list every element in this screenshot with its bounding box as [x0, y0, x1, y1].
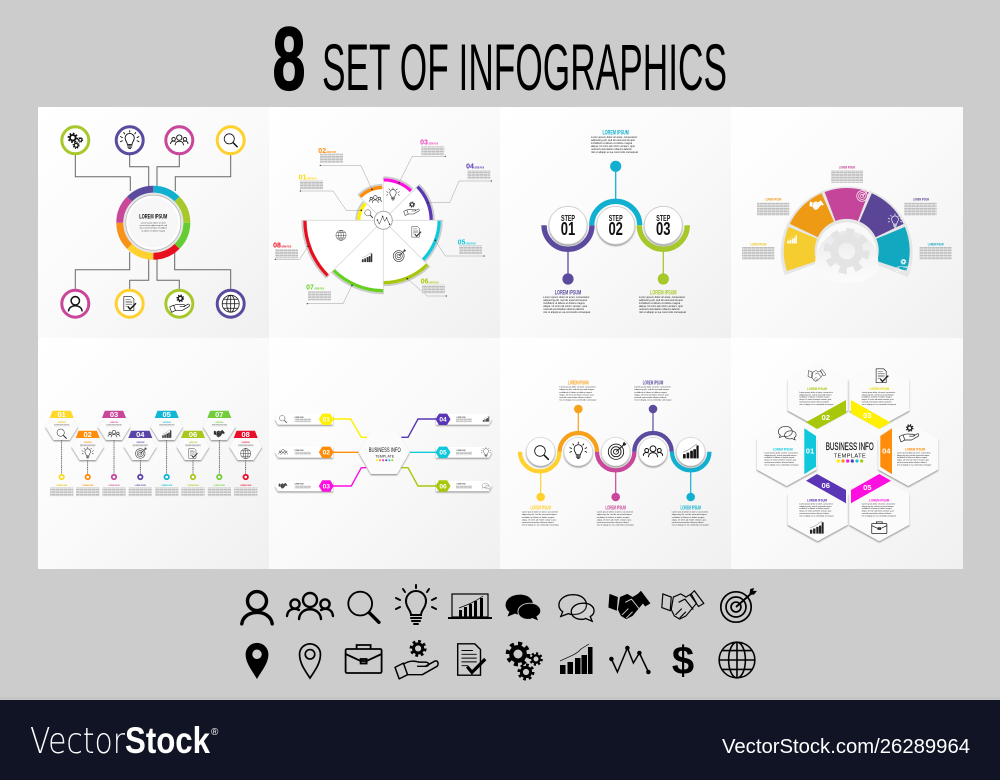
wedge captions: 02	[318, 148, 326, 155]
panel: three steps	[500, 107, 731, 338]
wave captions: nostrud exercitation ullamco laboris	[634, 396, 666, 399]
wedge captions: LOREM IPSUM	[306, 176, 316, 180]
hub center text	[123, 193, 183, 253]
hexagon captions: Lorem ipsum dolor sit amet, consectetur	[764, 451, 798, 454]
wave captions: adipiscing elit, sed do eiusmod tempor	[672, 513, 707, 516]
icon circles	[62, 127, 244, 317]
hexagon captions: LOREM IPSUM	[905, 446, 925, 452]
bar captions: LOREM IPSUM	[456, 484, 466, 486]
hexagon captions: adipiscing elit, sed do eiusmod tempor	[799, 393, 832, 396]
wave captions: aliqua. Ut enim ad minim veniam, quis	[597, 518, 631, 521]
number hexagons	[319, 414, 450, 492]
hub center text: ut labore et dolore magna	[141, 229, 166, 232]
step labels: 03	[656, 219, 671, 239]
wave captions: nisi ut aliquip ex ea commodo consequat	[522, 524, 559, 527]
wedge captions: LOREM IPSUM	[326, 150, 336, 154]
tab numbers: 08	[242, 430, 250, 439]
hexagon captions: nostrud exercitation ullamco laboris	[862, 400, 891, 404]
wedge edges	[302, 178, 441, 292]
panel: business info hub with six bars	[269, 338, 500, 569]
connectors	[333, 419, 436, 486]
hexagon captions: adipiscing elit, sed do eiusmod tempor	[799, 505, 832, 508]
wedge captions: LOREM IPSUM	[474, 166, 484, 170]
wave captions: aliqua. Ut enim ad minim veniam, quis	[672, 518, 706, 521]
footer band	[0, 697, 1000, 780]
hexagon captions: incididunt ut labore et dolore magna	[764, 456, 795, 459]
step captions: nisi ut aliquip ex ea commodo consequat	[543, 310, 590, 314]
center hexagon	[358, 430, 410, 474]
hexagon captions: aliqua. Ut enim ad minim veniam, quis	[862, 398, 894, 401]
backing arc	[785, 191, 908, 314]
wave captions: nostrud exercitation ullamco laboris	[597, 521, 629, 524]
hexagon captions: LOREM IPSUM	[773, 446, 793, 452]
hexagons	[757, 363, 938, 541]
step labels: STEP	[561, 213, 575, 223]
wedge icons	[336, 188, 421, 262]
band numbers: 06	[821, 481, 830, 490]
timeline captions: LOREM IPSUM	[163, 422, 171, 424]
wave captions: adipiscing elit, sed do eiusmod tempor	[559, 388, 594, 391]
wave captions: nisi ut aliquip ex ea commodo consequat	[634, 399, 672, 402]
band numbers: 03	[863, 411, 872, 420]
timeline captions: LOREM IPSUM	[242, 442, 250, 444]
step captions: aliqua. Ut enim ad minim veniam, quis	[543, 304, 588, 308]
wave captions: LOREM IPSUM	[568, 380, 589, 386]
title	[272, 10, 727, 110]
stems and pins	[536, 405, 695, 501]
center title: BUSINESS INFO	[826, 441, 874, 453]
hexagon captions: nostrud exercitation ullamco laboris	[862, 512, 891, 515]
wedge captions: 07	[306, 284, 314, 292]
numbers: 02	[323, 450, 330, 457]
tab numbers	[58, 410, 250, 439]
hexagon captions: incididunt ut labore et dolore magna	[862, 396, 893, 399]
step badges	[549, 206, 682, 244]
footer logo	[30, 720, 219, 762]
wave captions: incididunt ut labore et dolore magna	[559, 391, 593, 394]
step captions	[543, 130, 686, 314]
timeline captions: LOREM IPSUM	[189, 442, 197, 444]
center text: TEMPLATE	[375, 455, 395, 459]
numbers: 06	[439, 483, 447, 490]
hexagon captions: Lorem ipsum dolor sit amet, consectetur	[799, 391, 833, 394]
wedge captions: 06	[421, 278, 428, 286]
wave captions: nostrud exercitation ullamco laboris	[672, 521, 704, 524]
step captions: incididunt ut labore et dolore magna	[591, 141, 633, 145]
hexagon captions: adipiscing elit, sed do eiusmod tempor	[862, 505, 894, 508]
numbers	[323, 417, 447, 490]
wave captions: incididunt ut labore et dolore magna	[597, 516, 630, 519]
hexagon captions: nisi ut aliquip ex ea commodo consequat	[897, 463, 932, 466]
bar icons	[278, 415, 491, 489]
leader dots	[275, 156, 492, 304]
icon set: row 1	[242, 585, 757, 624]
center title: TEMPLATE	[834, 454, 866, 460]
wedge captions: LOREM IPSUM	[466, 242, 476, 246]
timeline captions: LOREM IPSUM	[84, 442, 92, 444]
segment captions	[742, 165, 952, 260]
numbers: 04	[439, 417, 447, 424]
step captions: LOREM IPSUM	[555, 290, 582, 296]
step labels: STEP	[609, 213, 623, 223]
colored segments	[783, 188, 910, 314]
timeline captions: LOREM IPSUM	[108, 485, 120, 487]
wave captions: incididunt ut labore et dolore magna	[634, 391, 668, 394]
hexagon captions: nostrud exercitation ullamco laboris	[764, 461, 794, 464]
wave captions: Lorem ipsum dolor sit amet, consectetur	[597, 511, 633, 514]
panel: semicircle gear	[731, 107, 963, 338]
center text: BUSINESS INFO	[369, 447, 401, 454]
wave captions: aliqua. Ut enim ad minim veniam, quis	[634, 393, 669, 396]
timeline captions: LOREM IPSUM	[214, 485, 225, 487]
tab numbers: 02	[84, 430, 92, 439]
gear	[828, 232, 866, 270]
hexagon captions: nostrud exercitation ullamco laboris	[799, 512, 829, 515]
footer link: VectorStock.com/26289964	[722, 735, 970, 758]
wedge captions: LOREM IPSUM	[281, 244, 291, 248]
wave captions: nostrud exercitation ullamco laboris	[522, 521, 554, 524]
center title	[826, 441, 874, 460]
band numbers	[806, 411, 891, 492]
panel: hexagon timeline	[38, 338, 269, 569]
wave captions: nostrud exercitation ullamco laboris	[559, 396, 591, 399]
leader lines	[275, 156, 491, 304]
step captions: aliqua. Ut enim ad minim veniam, quis	[591, 144, 636, 148]
tab numbers: 04	[136, 430, 145, 439]
hexagon captions: LOREM IPSUM	[807, 386, 827, 391]
segment captions: LOREM IPSUM	[928, 242, 944, 246]
wave captions: aliqua. Ut enim ad minim veniam, quis	[559, 393, 594, 396]
hexagon captions: nisi ut aliquip ex ea commodo consequat	[799, 514, 834, 517]
segment captions: LOREM IPSUM	[765, 198, 781, 202]
center dots	[837, 459, 863, 463]
bar captions: LOREM IPSUM	[294, 484, 304, 486]
timeline captions: LOREM IPSUM	[82, 485, 93, 487]
hexagon captions: Lorem ipsum dolor sit amet, consectetur	[799, 502, 833, 505]
segment captions: LOREM IPSUM	[913, 198, 929, 202]
step captions: Lorem ipsum dolor sit amet, consectetur	[591, 135, 637, 139]
segment captions: LOREM IPSUM	[839, 165, 855, 169]
wedge captions: LOREM IPSUM	[428, 142, 438, 146]
hexagons	[45, 413, 262, 460]
band numbers: 02	[821, 413, 830, 422]
bar captions: LOREM IPSUM	[294, 450, 304, 452]
wedge captions: LOREM IPSUM	[428, 280, 438, 284]
tab numbers: 01	[58, 410, 66, 419]
wedges	[269, 106, 498, 335]
wave arcs	[520, 433, 709, 471]
step captions: LOREM IPSUM	[650, 290, 677, 296]
hexagon captions: adipiscing elit, sed do eiusmod tempor	[897, 454, 930, 457]
step captions: nostrud exercitation ullamco laboris	[543, 307, 585, 311]
hub center text: do eiusmod tempor incididunt	[140, 227, 167, 230]
step captions: nisi ut aliquip ex ea commodo consequat	[591, 150, 638, 154]
step captions: incididunt ut labore et dolore magna	[639, 301, 681, 305]
timeline captions: LOREM IPSUM	[136, 442, 145, 444]
wave captions: adipiscing elit, sed do eiusmod tempor	[522, 513, 557, 516]
timeline captions: LOREM IPSUM	[215, 422, 224, 424]
hexagon captions: aliqua. Ut enim ad minim veniam, quis	[764, 459, 796, 462]
timeline captions: LOREM IPSUM	[110, 422, 118, 424]
step captions: LOREM IPSUM	[602, 130, 629, 136]
white segment icons	[787, 189, 910, 272]
step captions: adipiscing elit, sed do eiusmod tempor	[591, 138, 635, 142]
step captions: adipiscing elit, sed do eiusmod tempor	[543, 298, 588, 302]
hexagon captions: incididunt ut labore et dolore magna	[799, 396, 830, 399]
step labels	[561, 213, 671, 239]
hexagon icons	[57, 429, 251, 459]
bar captions: LOREM IPSUM	[456, 417, 466, 419]
title: 8	[272, 10, 306, 110]
step labels: 01	[561, 219, 575, 239]
panel: hexagon flower	[731, 338, 963, 569]
center text	[369, 447, 401, 459]
timeline captions: LOREM IPSUM	[161, 485, 172, 487]
panel: stepped pie with eight wedges	[269, 106, 500, 338]
wave captions: LOREM IPSUM	[643, 380, 663, 386]
hexagon captions: aliqua. Ut enim ad minim veniam, quis	[862, 510, 894, 513]
center zigzag badge	[374, 211, 392, 229]
wave captions: incididunt ut labore et dolore magna	[522, 516, 555, 519]
step captions: aliqua. Ut enim ad minim veniam, quis	[639, 304, 684, 308]
wave captions: adipiscing elit, sed do eiusmod tempor	[597, 513, 632, 516]
timeline captions: LOREM IPSUM	[240, 485, 251, 487]
hub ring	[106, 175, 201, 270]
wave captions: LOREM IPSUM	[530, 506, 551, 512]
bar captions	[294, 417, 472, 489]
hub center text: Lorem ipsum dolor sit amet	[141, 222, 166, 224]
step arcs	[544, 201, 687, 249]
step labels: 02	[608, 219, 623, 239]
wave captions: LOREM IPSUM	[680, 506, 701, 512]
wedge captions: 04	[466, 164, 474, 170]
tab numbers: 06	[189, 430, 197, 439]
wave captions: adipiscing elit, sed do eiusmod tempor	[634, 388, 669, 391]
icon badges	[526, 437, 705, 466]
hub center text: consectetur adipiscing elit sed	[139, 224, 168, 227]
tab numbers: 07	[215, 410, 223, 419]
tab numbers: 03	[110, 410, 118, 419]
timeline captions: LOREM IPSUM	[135, 485, 146, 487]
step captions: incididunt ut labore et dolore magna	[543, 301, 585, 305]
hexagon captions: incididunt ut labore et dolore magna	[897, 456, 928, 459]
segment captions: LOREM IPSUM	[750, 242, 766, 246]
hexagon captions: nisi ut aliquip ex ea commodo consequat	[862, 403, 896, 406]
icons of hub panel	[69, 131, 239, 312]
hexagon captions: LOREM IPSUM	[807, 498, 827, 502]
step captions: nostrud exercitation ullamco laboris	[591, 147, 632, 151]
wave captions: Lorem ipsum dolor sit amet, consectetur	[634, 386, 671, 389]
tab numbers: 05	[163, 410, 171, 419]
hexagon captions: adipiscing elit, sed do eiusmod tempor	[862, 393, 894, 396]
band numbers: 05	[863, 483, 872, 492]
central dome	[815, 231, 878, 282]
icon: dollar: $	[672, 639, 694, 683]
hexagon captions: LOREM IPSUM	[869, 386, 890, 391]
wave captions: nisi ut aliquip ex ea commodo consequat	[672, 524, 709, 527]
timeline captions: LOREM IPSUM	[56, 485, 67, 487]
hexagon captions: adipiscing elit, sed do eiusmod tempor	[764, 454, 797, 457]
wedge captions: LOREM IPSUM	[314, 286, 324, 290]
wedge captions: 03	[420, 140, 428, 146]
wave captions: Lorem ipsum dolor sit amet, consectetur	[559, 386, 596, 389]
band numbers: 01	[806, 446, 815, 456]
numbers: 01	[323, 417, 330, 424]
footer logo: Stock	[125, 720, 210, 761]
hexagon captions: Lorem ipsum dolor sit amet, consectetur	[897, 451, 931, 454]
hexagon captions: nisi ut aliquip ex ea commodo consequat	[862, 514, 896, 517]
hexagon captions: nisi ut aliquip ex ea commodo consequat	[799, 403, 834, 406]
connector lines	[75, 155, 231, 289]
hub center text: LOREM IPSUM	[139, 214, 167, 220]
footer logo: ®	[211, 727, 219, 738]
dashed stems	[62, 438, 246, 475]
footer logo: Vector	[30, 721, 125, 762]
timeline captions: LOREM IPSUM	[58, 422, 66, 424]
bar captions: LOREM IPSUM	[294, 417, 304, 419]
panel: five-step wave	[500, 338, 731, 569]
hexagon captions	[764, 386, 932, 517]
hexagon captions: LOREM IPSUM	[869, 498, 890, 502]
badge icons	[535, 442, 699, 459]
timeline captions	[50, 422, 257, 496]
hexagon captions: Lorem ipsum dolor sit amet, consectetur	[862, 502, 896, 505]
hexagon captions: Lorem ipsum dolor sit amet, consectetur	[862, 391, 896, 394]
wedge captions: 01	[299, 174, 306, 182]
wave captions: Lorem ipsum dolor sit amet, consectetur	[522, 511, 558, 514]
wave captions: nisi ut aliquip ex ea commodo consequat	[597, 524, 634, 527]
hexagon captions: incididunt ut labore et dolore magna	[799, 507, 830, 510]
wave captions: incididunt ut labore et dolore magna	[672, 516, 705, 519]
numbers: 03	[323, 483, 330, 490]
hexagon captions: nisi ut aliquip ex ea commodo consequat	[764, 463, 799, 466]
number tabs	[50, 411, 258, 438]
wedge captions: 08	[273, 242, 281, 250]
band numbers: 04	[882, 446, 891, 456]
bar captions: LOREM IPSUM	[456, 450, 466, 452]
hexagon captions: aliqua. Ut enim ad minim veniam, quis	[799, 398, 831, 401]
colored bands	[804, 400, 892, 503]
icon set: row 2	[246, 639, 755, 683]
timeline dots	[60, 475, 248, 479]
wedge captions: 05	[458, 240, 465, 246]
wedge captions	[273, 140, 490, 300]
wave captions: LOREM IPSUM	[605, 506, 626, 512]
hexagon icons	[778, 369, 919, 534]
numbers: 05	[439, 450, 447, 457]
step stems and pins	[562, 161, 669, 285]
hexagon captions: incididunt ut labore et dolore magna	[862, 507, 893, 510]
wave captions: aliqua. Ut enim ad minim veniam, quis	[522, 518, 556, 521]
step captions: adipiscing elit, sed do eiusmod tempor	[639, 298, 683, 302]
panel: circle hub with eight icons	[38, 107, 269, 338]
hexagon captions: aliqua. Ut enim ad minim veniam, quis	[799, 510, 831, 513]
hexagon captions: nostrud exercitation ullamco laboris	[799, 400, 829, 404]
hexagon captions: nostrud exercitation ullamco laboris	[897, 461, 927, 464]
center dots	[376, 459, 393, 461]
wave captions: Lorem ipsum dolor sit amet, consectetur	[672, 511, 708, 514]
step captions: Lorem ipsum dolor sit amet, consectetur	[543, 295, 590, 299]
step captions: nostrud exercitation ullamco laboris	[639, 307, 680, 311]
step labels: STEP	[656, 213, 671, 223]
step captions: Lorem ipsum dolor sit amet, consectetur	[639, 295, 685, 299]
bars	[275, 414, 492, 491]
step captions: nisi ut aliquip ex ea commodo consequat	[639, 310, 686, 314]
hexagon captions: aliqua. Ut enim ad minim veniam, quis	[897, 459, 929, 462]
wave captions	[522, 380, 709, 527]
timeline captions: LOREM IPSUM	[188, 485, 199, 487]
wave captions: nisi ut aliquip ex ea commodo consequat	[559, 399, 597, 402]
